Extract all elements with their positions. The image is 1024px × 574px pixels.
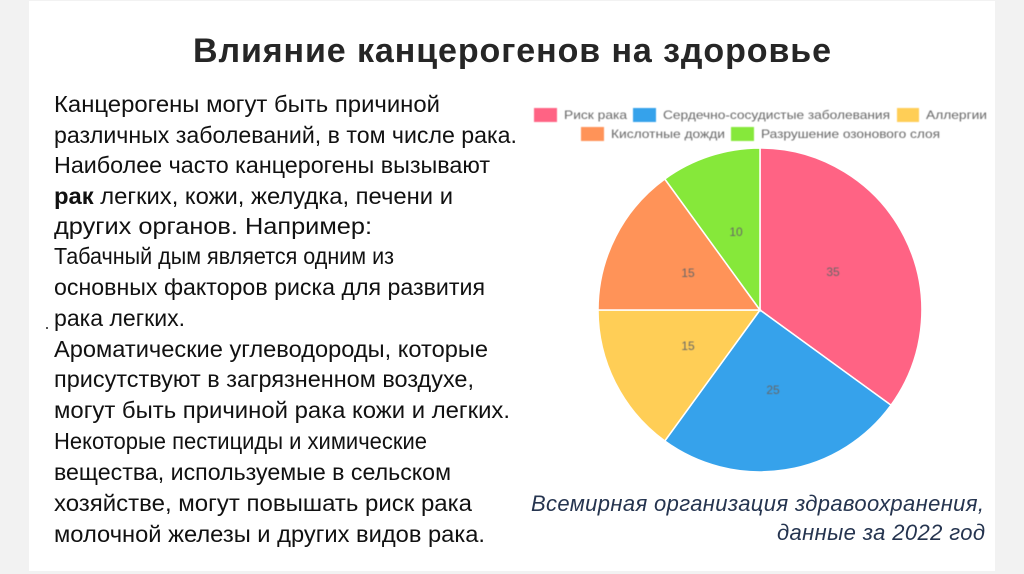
text block: carcinogens description: хозяйстве, могут повышать риск рака [54, 490, 472, 516]
text block: carcinogens description: Наиболее часто канцерогены вызывают [54, 152, 490, 178]
chart legend [534, 108, 987, 141]
text block: carcinogens description: вещества, используемые в сельском [54, 459, 451, 485]
text block: carcinogens description: молочной железы и других видов рака. [54, 521, 485, 547]
caption: data source: Всемирная организация здравоохранения, [531, 491, 984, 516]
chart legend: Аллергии [926, 108, 987, 122]
slice: acid rain 15 [598, 179, 760, 310]
pie chart [598, 148, 922, 472]
text block: carcinogens description: Табачный дым является одним из [54, 243, 394, 269]
text block: carcinogens description: различных заболеваний, в том числе рака. [54, 122, 517, 148]
chart legend: Кислотные дожди [611, 127, 725, 141]
slice: cardiovascular 25 [665, 310, 891, 472]
text block: carcinogens description: основных факторов риска для развития [54, 274, 485, 300]
text block: carcinogens description: могут быть причиной рака кожи и легких. [54, 397, 510, 423]
pie value labels: 25 [766, 383, 780, 397]
pie value labels: 15 [681, 266, 695, 280]
slice: ozone depletion 10 [665, 148, 760, 310]
chart legend: Сердечно-сосудистые заболевания [663, 108, 890, 122]
text block: carcinogens description: присутствуют в загрязненном воздухе, [54, 366, 474, 392]
stray dot [46, 327, 48, 329]
caption: data source [531, 491, 985, 545]
text block: carcinogens description: Ароматические углеводороды, которые [54, 336, 488, 362]
text block: carcinogens description: других органов. Например: [54, 213, 372, 239]
title: Влияние канцерогенов на здоровье [193, 32, 831, 70]
pie value labels: 10 [729, 225, 743, 239]
slice: cancer risk 35 [760, 148, 922, 405]
text block: carcinogens description [54, 91, 517, 547]
chart legend: Разрушение озонового слоя [761, 127, 940, 141]
text block: carcinogens description: рака легких. [54, 305, 185, 331]
text block: carcinogens description: рак легких, кожи, желудка, печени и [54, 183, 453, 209]
pie value labels [681, 225, 840, 397]
chart legend: Риск рака [564, 108, 627, 122]
text block: carcinogens description: Канцерогены могут быть причиной [54, 91, 440, 117]
pie value labels: 35 [826, 265, 840, 279]
pie value labels: 15 [681, 339, 695, 353]
text block: carcinogens description: Некоторые пестициды и химические [54, 428, 427, 454]
slice: allergies 15 [598, 310, 760, 441]
caption: data source: данные за 2022 год [777, 520, 985, 545]
